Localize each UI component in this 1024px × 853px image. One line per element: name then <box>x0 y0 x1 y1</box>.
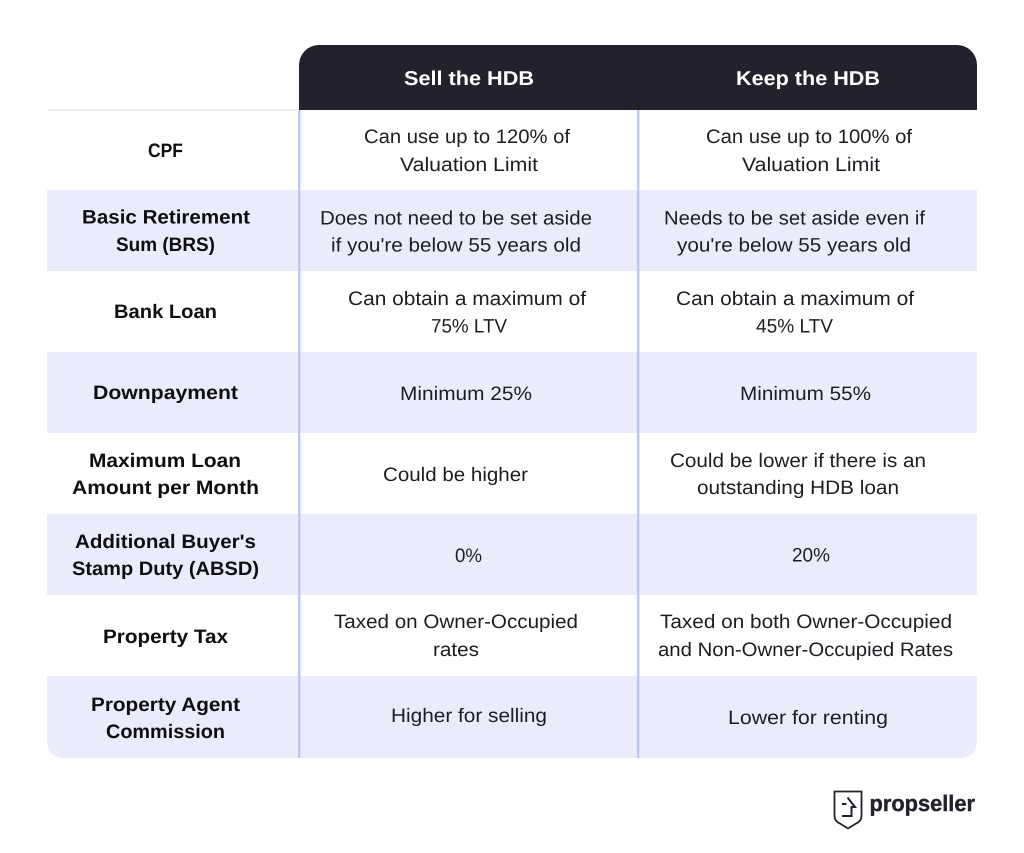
row bands <box>47 190 977 758</box>
row: Additional Buyer's Stamp Duty <box>72 531 830 580</box>
row: Additional Buyer's Stamp Duty: 20% <box>792 544 830 566</box>
row: Basic Retirement Sum: you're below 55 years old <box>677 234 911 256</box>
row: CPF: CPF <box>148 140 183 162</box>
heading: sell the HDB: Sell the HDB <box>404 68 534 90</box>
heading: keep the HDB: Keep the HDB <box>736 68 880 90</box>
row: Bank Loan: Bank Loan <box>114 301 217 323</box>
row: Basic Retirement Sum: Needs to be set aside even if <box>664 208 926 230</box>
row: Basic Retirement Sum: Basic Retirement <box>82 206 251 228</box>
row: Bank Loan <box>114 288 915 338</box>
row: Downpayment: Minimum 55% <box>740 383 871 405</box>
row: Property Tax: Property Tax <box>103 626 228 648</box>
row: CPF <box>148 126 913 176</box>
row: Maximum Loan Amount per Month: outstanding HDB loan <box>697 477 899 499</box>
wordmark: propseller <box>870 791 975 816</box>
row: CPF: Can use up to 120% of <box>364 126 571 148</box>
row: Bank Loan: 45% LTV <box>756 316 833 338</box>
row: Downpayment <box>93 382 871 405</box>
row: Property Agent Commission: Higher for selling <box>391 705 547 727</box>
row: Property Tax: rates <box>433 639 479 661</box>
row: Maximum Loan Amount per Month: Amount per Month <box>72 477 259 499</box>
row: CPF: Can use up to 100% of <box>706 126 913 148</box>
header bar <box>299 45 977 110</box>
row: Property Tax <box>103 611 953 661</box>
row: CPF: Valuation Limit <box>742 154 881 176</box>
row: Additional Buyer's Stamp Duty: Stamp Duty (ABSD) <box>72 558 259 580</box>
row: Maximum Loan Amount per Month <box>72 450 926 499</box>
row: Basic Retirement Sum: Does not need to be set aside <box>320 208 592 230</box>
row: Downpayment: Downpayment <box>93 382 239 404</box>
row: Bank Loan: Can obtain a maximum of <box>676 288 915 310</box>
row: Maximum Loan Amount per Month: Could be lower if there is an <box>670 450 926 472</box>
row: Property Agent Commission: Commission <box>106 721 225 743</box>
icon: shield <box>834 792 862 828</box>
row: Property Agent Commission: Property Agent <box>91 694 241 716</box>
row: Basic Retirement Sum <box>82 206 926 256</box>
row: Property Tax: Taxed on Owner-Occupied <box>334 611 578 633</box>
row: Additional Buyer's Stamp Duty: Additional Buyer's <box>75 531 256 553</box>
row: CPF: Valuation Limit <box>400 154 539 176</box>
row: Downpayment: Minimum 25% <box>400 383 532 405</box>
row: Basic Retirement Sum: Sum (BRS) <box>116 234 215 256</box>
column dividers <box>298 110 639 758</box>
row: Additional Buyer's Stamp Duty: 0% <box>455 545 482 567</box>
row: Property Agent Commission <box>91 694 888 743</box>
row: Property Tax: and Non-Owner-Occupied Rates <box>658 639 953 661</box>
row: Property Agent Commission: Lower for renting <box>728 707 888 729</box>
row: Basic Retirement Sum: if you're below 55 years old <box>331 234 581 256</box>
row: Bank Loan: Can obtain a maximum of <box>348 288 587 310</box>
row: Maximum Loan Amount per Month: Maximum Loan <box>89 450 241 472</box>
logo: propseller <box>834 791 975 828</box>
row: Bank Loan: 75% LTV <box>431 316 507 338</box>
row: Maximum Loan Amount per Month: Could be higher <box>383 464 529 486</box>
row: Property Tax: Taxed on both Owner-Occupied <box>660 611 952 633</box>
